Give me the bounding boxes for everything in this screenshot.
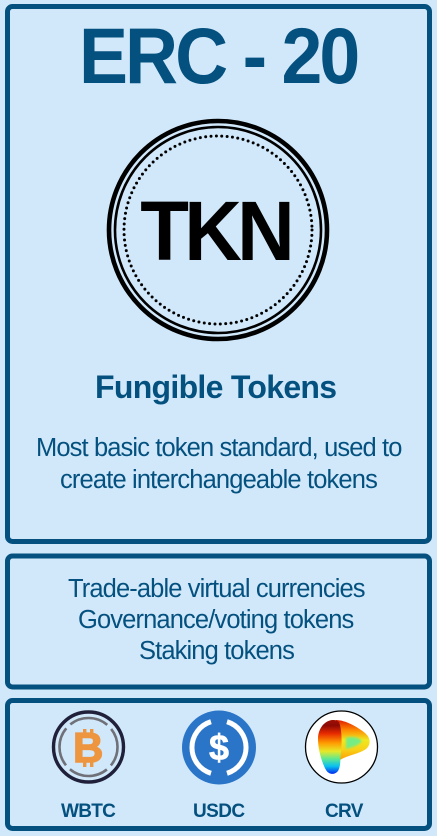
icon: USDC: $ bbox=[209, 727, 229, 768]
panel: ERC-20 overview bbox=[8, 6, 430, 542]
text block: use case list: Governance/voting tokens bbox=[78, 606, 354, 634]
icon: CRV bbox=[306, 711, 378, 783]
text block: use case list: Staking tokens bbox=[139, 637, 294, 665]
label: WBTC: WBTC bbox=[61, 801, 116, 822]
label: CRV: CRV bbox=[325, 801, 364, 822]
text block: description: Most basic token standard, used to bbox=[36, 434, 402, 462]
label: USDC: USDC bbox=[193, 801, 245, 822]
panel: token examples bbox=[8, 700, 430, 828]
icon: WBTC: B bbox=[73, 724, 103, 771]
text block: description: create interchangeable tokens bbox=[60, 466, 377, 494]
text block: use case list bbox=[68, 575, 365, 665]
icon: WBTC bbox=[54, 712, 124, 782]
panel: use cases bbox=[8, 556, 430, 687]
title: ERC - 20 bbox=[79, 13, 358, 101]
text block: description bbox=[36, 434, 402, 494]
heading: Fungible Tokens: Fungible Tokens bbox=[95, 369, 336, 405]
icon: TKN token bbox=[109, 121, 327, 339]
icon: TKN token: TKN bbox=[140, 185, 290, 278]
text block: use case list: Trade-able virtual currencies bbox=[68, 575, 365, 603]
icon: USDC bbox=[182, 710, 256, 784]
